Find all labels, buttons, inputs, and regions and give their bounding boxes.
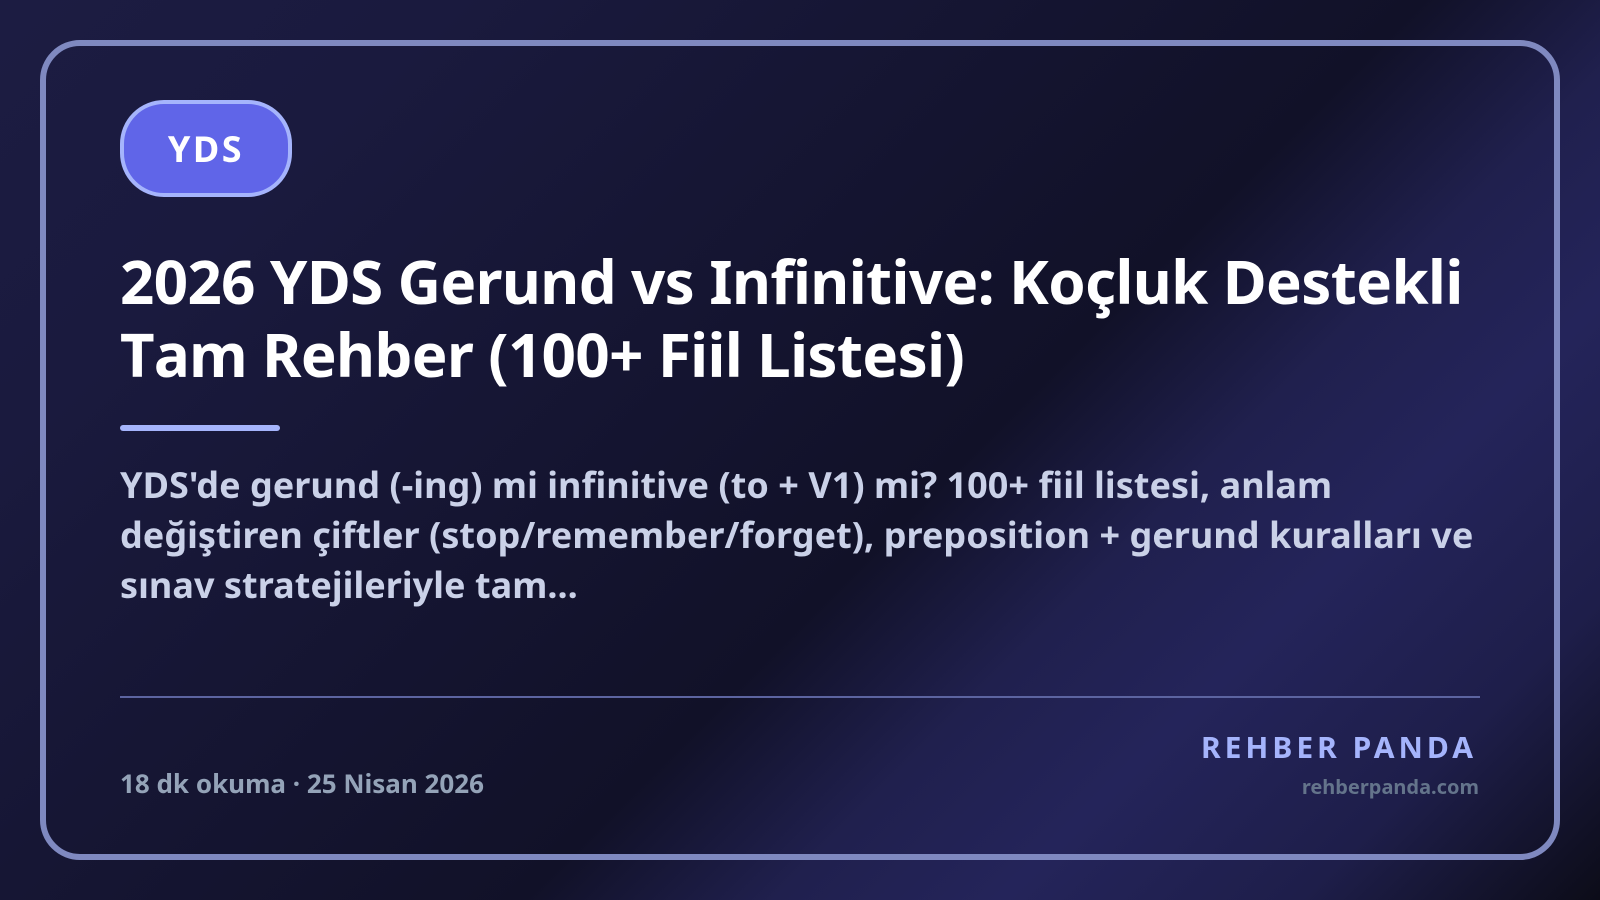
accent divider <box>120 425 280 431</box>
badge: YDS: YDS <box>168 124 244 173</box>
title: Tam Rehber (100+ Fiil Listesi) <box>120 313 964 395</box>
brand name: REHBER PANDA <box>1201 726 1477 767</box>
description: sınav stratejileriyle tam... <box>120 560 578 609</box>
title <box>120 240 1463 395</box>
title: 2026 YDS Gerund vs Infinitive: Koçluk Destekli <box>120 240 1463 322</box>
description: değiştiren çiftler (stop/remember/forget), preposition + gerund kuralları ve <box>120 510 1473 559</box>
description <box>120 460 1473 609</box>
brand url: rehberpanda.com <box>1302 773 1479 800</box>
description: YDS'de gerund (-ing) mi infinitive (to + V1) mi? 100+ fiil listesi, anlam <box>120 460 1332 509</box>
footer divider <box>120 696 1480 698</box>
meta: reading time and date: 18 dk okuma · 25 Nisan 2026 <box>120 765 484 801</box>
badge: YDS <box>120 100 292 197</box>
